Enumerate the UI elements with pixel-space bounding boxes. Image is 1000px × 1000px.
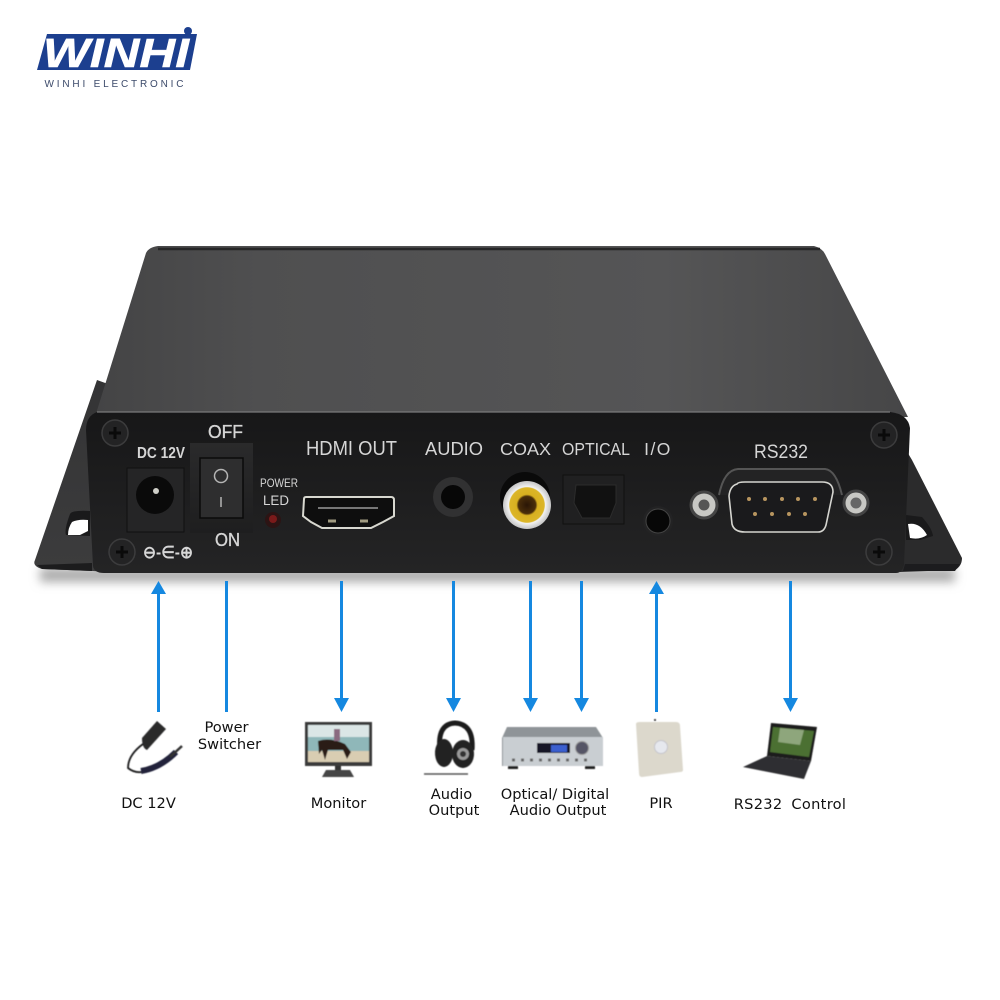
right mounting flange	[900, 440, 962, 572]
label: Power Switcher: Power	[204, 719, 249, 736]
port: COAX: COAX	[500, 439, 551, 459]
logo: WINHI Electronic	[37, 27, 197, 90]
arrow: monitor	[334, 581, 349, 712]
logo caption: WINHI ELECTRONIC	[44, 79, 184, 90]
label: Optical/ Digital Audio Output: Audio Output	[510, 802, 607, 819]
port: HDMI OUT: HDMI OUT	[306, 438, 397, 460]
ground shadow	[40, 568, 955, 582]
port: RS232: RS232	[754, 442, 808, 463]
line: power switcher	[225, 581, 228, 712]
product: media player rear view	[34, 246, 962, 582]
port: DC 12V	[127, 445, 193, 562]
label: Monitor: Monitor	[311, 795, 366, 812]
logo wordmark: WINHI	[43, 30, 191, 76]
port: HDMI OUT	[303, 438, 397, 528]
label: DC 12V: DC 12V	[121, 795, 176, 812]
label: Audio Output: Output	[429, 802, 480, 819]
power switch: ON	[215, 530, 240, 550]
power LED: POWER	[260, 476, 298, 490]
icon: monitor	[305, 722, 372, 777]
power switch	[190, 422, 253, 550]
front panel	[86, 412, 910, 573]
port: OPTICAL	[562, 439, 630, 524]
left mounting flange	[34, 380, 108, 572]
icon: headphones	[424, 723, 474, 774]
port: OPTICAL: OPTICAL	[562, 439, 630, 459]
arrow: DC 12V (up)	[151, 581, 166, 712]
arrow: RS232 control	[783, 581, 798, 712]
port: RS232	[691, 442, 868, 532]
power LED	[260, 476, 298, 528]
logo badge	[37, 34, 197, 70]
port: AUDIO: AUDIO	[425, 438, 483, 459]
top cover	[95, 246, 908, 417]
port: DC 12V: ⊖-∈-⊕	[143, 543, 193, 562]
port: I/O	[643, 439, 673, 536]
icon: DC power adapter	[128, 721, 182, 772]
label: Power Switcher: Switcher	[198, 736, 261, 753]
port: COAX	[500, 439, 551, 529]
icon: audio amplifier	[502, 727, 603, 769]
port: DC 12V: DC 12V	[137, 445, 186, 462]
arrow: audio output	[446, 581, 461, 712]
label: Audio Output	[429, 786, 480, 819]
icon: laptop	[743, 723, 817, 779]
logo dot	[184, 27, 192, 35]
icon: PIR sensor	[636, 719, 683, 777]
screws	[102, 420, 897, 565]
label: RS232 Control: RS232 Control	[734, 796, 846, 813]
label: Power Switcher	[198, 719, 261, 753]
label: Audio Output: Audio	[431, 786, 472, 803]
label: PIR: PIR	[649, 795, 673, 812]
arrow: optical	[574, 581, 589, 712]
arrow: coax	[523, 581, 538, 712]
power switch: OFF	[208, 422, 243, 442]
arrow: PIR (up)	[649, 581, 664, 712]
port: I/O: I/O	[644, 439, 672, 459]
label: Optical/ Digital Audio Output: Optical/ Digital	[501, 786, 609, 803]
label: Optical/ Digital Audio Output	[501, 786, 609, 819]
port: AUDIO	[425, 438, 483, 517]
power LED: LED	[263, 492, 289, 508]
